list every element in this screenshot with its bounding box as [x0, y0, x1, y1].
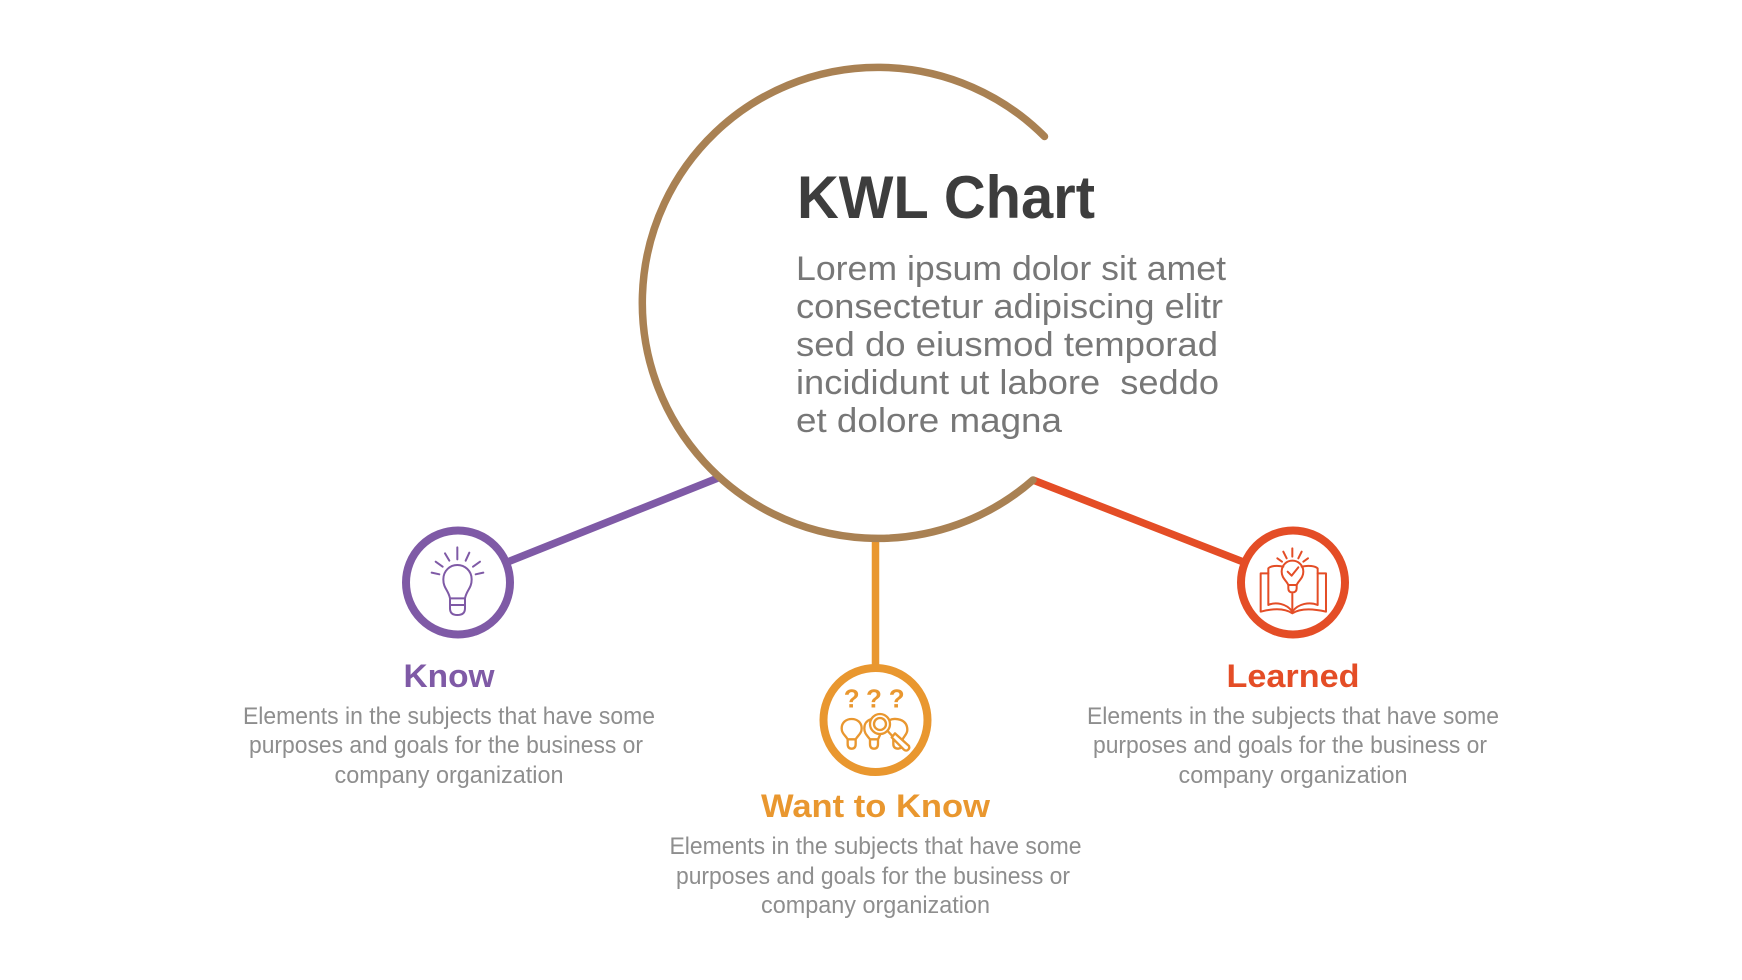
central description: Lorem ipsum dolor sit amet — [796, 250, 1227, 288]
know description: company organization — [334, 762, 564, 789]
node: want to know — [670, 668, 1082, 919]
icon: question marks, bulbs and magnifier: ? — [889, 684, 905, 714]
node: learned — [1087, 530, 1499, 789]
icon: question marks, bulbs and magnifier: ? — [866, 684, 882, 714]
want to know description — [670, 833, 1082, 919]
know description: purposes and goals for the business or — [249, 732, 643, 759]
want to know description: purposes and goals for the business or — [676, 863, 1070, 890]
central description: consectetur adipiscing elitr — [796, 288, 1223, 326]
icon: book with bulb and check — [1261, 548, 1326, 613]
connector: learned — [1033, 480, 1246, 563]
learned description: purposes and goals for the business or — [1093, 732, 1487, 759]
learned description: company organization — [1178, 762, 1408, 789]
learned ring — [1241, 530, 1345, 634]
want to know description: Elements in the subjects that have some — [670, 833, 1082, 860]
know ring — [406, 530, 510, 634]
know description — [243, 703, 655, 789]
know description: Elements in the subjects that have some — [243, 703, 655, 730]
central description: et dolore magna — [796, 402, 1062, 440]
node: know — [243, 530, 655, 789]
central description — [796, 250, 1227, 440]
title: KWL Chart — [797, 164, 1095, 231]
central description: sed do eiusmod temporad — [796, 326, 1218, 364]
want to know description: company organization — [761, 892, 990, 919]
icon: question marks, bulbs and magnifier: ? — [844, 684, 860, 714]
connector: know — [505, 478, 718, 563]
learned description: Elements in the subjects that have some — [1087, 703, 1499, 730]
icon: light bulb — [432, 547, 483, 615]
icon: question marks, bulbs and magnifier — [842, 684, 909, 751]
know heading: Know — [404, 658, 495, 694]
want to know heading: Want to Know — [761, 788, 990, 824]
main open circle — [642, 67, 1044, 538]
learned description — [1087, 703, 1499, 789]
learned heading: Learned — [1226, 658, 1360, 694]
want to know ring — [824, 668, 928, 772]
central description: incididunt ut labore seddo — [796, 364, 1219, 402]
connector: want to know — [872, 535, 879, 668]
